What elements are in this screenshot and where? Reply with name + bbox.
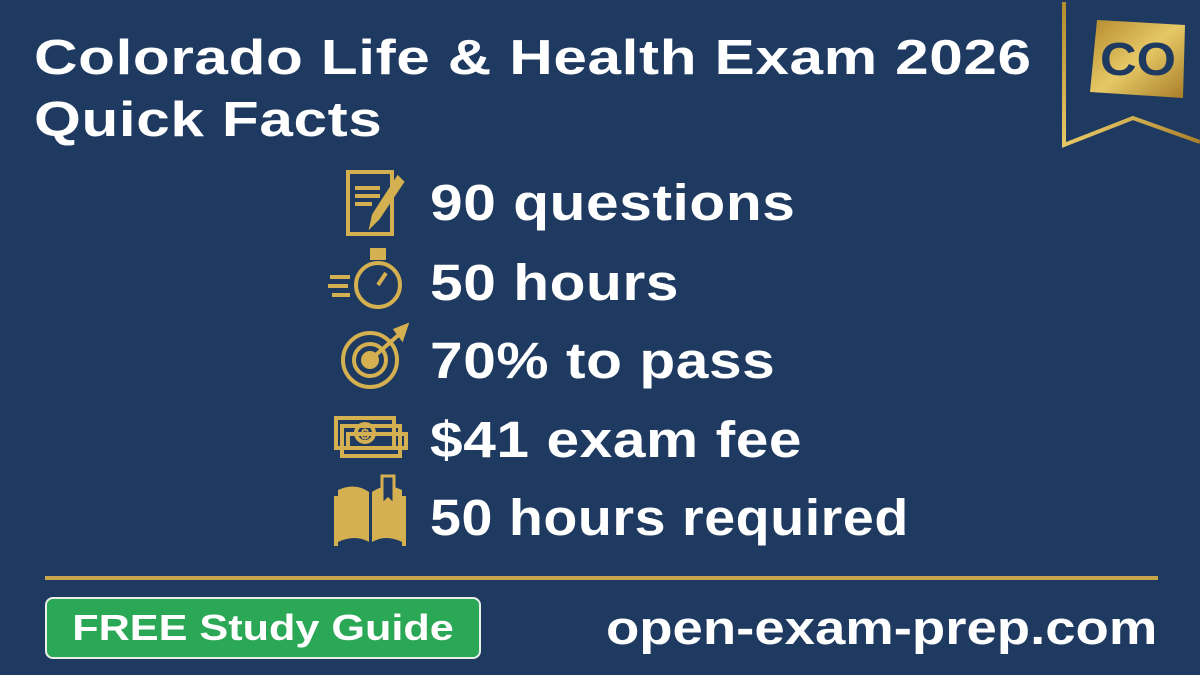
- url: open-exam-prep.com: [606, 601, 1157, 654]
- fact: pass: 70% to pass: [430, 332, 775, 389]
- fact: fee: $41 exam fee: [430, 411, 802, 468]
- fact: required: 50 hours required: [430, 489, 909, 546]
- icon: notepad: [348, 172, 402, 234]
- divider: [45, 576, 1158, 580]
- icon: money: $: [361, 426, 370, 443]
- icon: stopwatch: [328, 250, 400, 307]
- badge: CO: CO: [1100, 34, 1176, 85]
- title: Quick Facts: [34, 93, 382, 147]
- button: free study guide: FREE Study Guide: [72, 607, 454, 648]
- fact: hours: 50 hours: [430, 254, 679, 311]
- icon: money: [336, 418, 406, 456]
- button: free study guide: [45, 597, 481, 659]
- icon: book: [334, 476, 406, 546]
- icon: target: [343, 326, 406, 387]
- title: Colorado Life & Health Exam 2026: [34, 31, 1032, 85]
- icons column: [328, 170, 410, 546]
- title: [34, 31, 1032, 147]
- fact: questions: 90 questions: [430, 174, 795, 231]
- badge: CO: [1062, 2, 1200, 148]
